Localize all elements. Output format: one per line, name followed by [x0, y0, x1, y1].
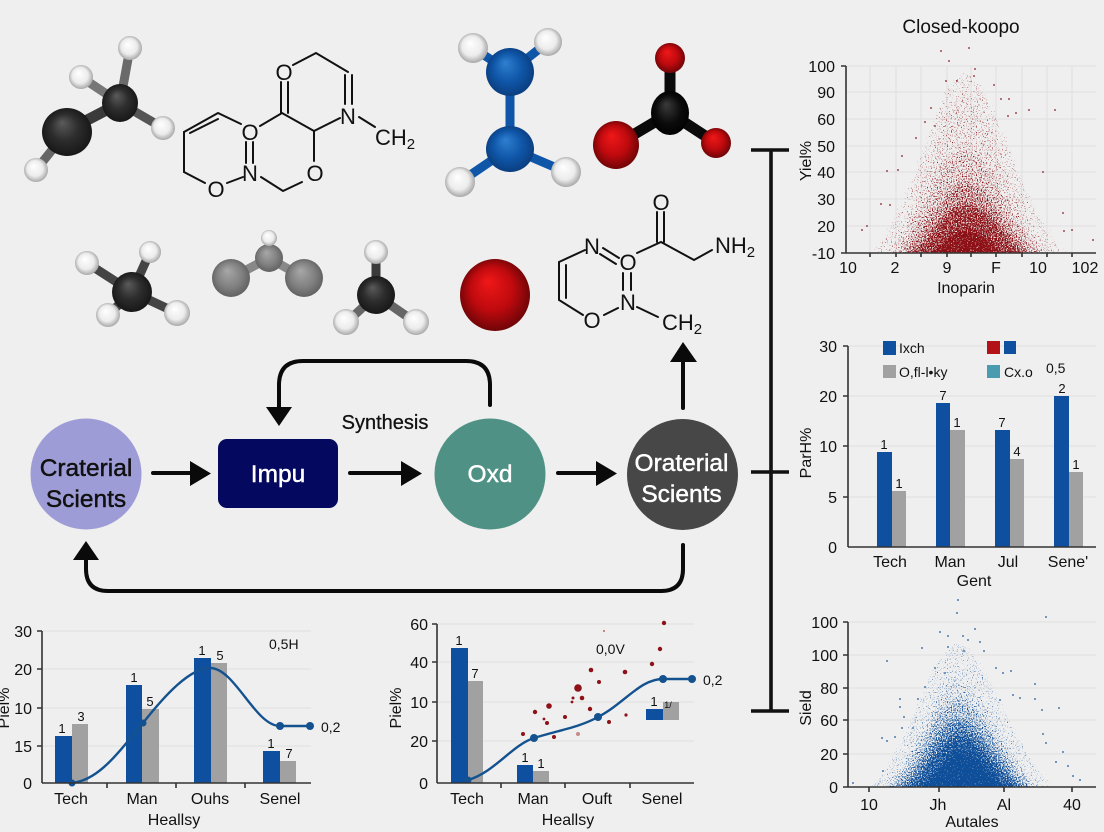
legend — [883, 340, 1066, 380]
chart: bottom left bars and line: 1 — [58, 721, 66, 736]
bars — [55, 658, 296, 783]
chart: bottom left bars and line: Heallsy — [148, 812, 200, 829]
chart: middle right bars: 2 — [1058, 381, 1066, 396]
chart: middle right bars: Jul — [998, 554, 1018, 571]
structural formula: lower ring: O — [619, 250, 637, 275]
chart: middle right bars: Man — [934, 554, 966, 571]
chart: middle right bars: ParH% — [798, 428, 815, 478]
chart: bottom left bars and line: 5 — [146, 694, 154, 709]
structural formula: lower ring: NH — [715, 233, 747, 258]
chart: bottom middle bars and line: 7 — [471, 666, 479, 681]
chart: bottom left bars and line: 0 — [23, 776, 32, 793]
red scatter points — [521, 621, 666, 739]
legend: Ixch — [899, 340, 925, 356]
chart: middle right bars: 0 — [828, 540, 837, 557]
structural formula: lower ring — [559, 190, 755, 338]
chart: bottom middle bars and line: 0,0V — [596, 641, 625, 657]
chart: bottom middle bars and line: 40 — [410, 655, 428, 672]
chart: blue scatter: Sield — [798, 690, 815, 726]
chart: red scatter: 2 — [891, 260, 900, 277]
chart: middle right bars: 7 — [998, 415, 1006, 430]
chart: blue scatter: 100 — [811, 615, 838, 632]
chart: middle right bars: 5 — [828, 490, 837, 507]
chart: red scatter: 100 — [808, 59, 835, 76]
chart: middle right bars: 7 — [939, 388, 947, 403]
arrow: to Impu — [153, 461, 211, 486]
chart: bottom left bars and line: 3 — [77, 709, 85, 724]
structural formula: upper ring system: CH — [375, 125, 407, 150]
structural formula: lower ring: N — [620, 290, 636, 315]
chart: bottom middle bars and line: Man — [517, 791, 549, 808]
chart: bottom left bars and line: 10 — [14, 701, 32, 718]
arrow: feedback loop bottom — [73, 541, 683, 591]
node: Oxd — [434, 418, 546, 530]
chart: middle right bars: 1 — [880, 437, 888, 452]
chart: bottom left bars and line: 30 — [14, 624, 32, 641]
chart: red scatter: Inoparin — [937, 280, 995, 297]
chart: red scatter: 102 — [1072, 260, 1098, 277]
structural formula: upper ring system: O — [241, 120, 259, 145]
molecule: methane, dark centre — [75, 241, 190, 327]
chart: blue scatter — [798, 600, 1096, 831]
chart: middle right bars: 1 — [895, 476, 903, 491]
legend: Cx.o — [1004, 364, 1033, 380]
structural formula: upper ring system: 2 — [407, 136, 415, 153]
chart: red scatter: 30 — [817, 192, 835, 209]
molecule: dark ball-and-stick with hydrogens — [24, 36, 175, 182]
legend: 0,5 — [1046, 360, 1066, 376]
trend line — [464, 675, 696, 784]
structural formula: upper ring system: N — [340, 104, 356, 129]
chart: bottom middle bars and line: 1 — [521, 750, 529, 765]
molecule: grey ball-and-stick — [212, 230, 323, 297]
chart: bottom left bars and line: Ouhs — [191, 791, 229, 808]
chart: bottom left bars and line: 1 — [267, 736, 275, 751]
chart: bottom middle bars and line: 1 — [650, 694, 658, 709]
chart: blue scatter: 10 — [860, 797, 878, 814]
node: Craterial Scients: Scients — [46, 486, 126, 513]
chart: blue scatter: Al — [997, 797, 1011, 814]
node: Impu — [218, 439, 338, 508]
chart: red scatter: 9 — [943, 260, 952, 277]
chart: middle right bars: Gent — [957, 573, 992, 590]
structural formula: upper ring system: O — [207, 177, 225, 202]
structural formula: upper ring system: O — [275, 60, 293, 85]
chart: bottom middle bars and line: 10 — [410, 695, 428, 712]
chart: middle right bars: 1 — [1072, 457, 1080, 472]
chart: blue scatter: 80 — [820, 681, 838, 698]
chart: blue scatter: Autales — [945, 814, 999, 831]
arrow: feedback loop top — [266, 361, 490, 426]
chart: bottom left bars and line: Man — [126, 791, 158, 808]
chart: bottom middle bars and line: Senel — [642, 791, 682, 808]
chart: bottom middle bars and line: 60 — [410, 617, 428, 634]
chart: bottom middle bars and line: 1 — [537, 756, 545, 771]
chart: bottom middle bars and line — [388, 617, 723, 829]
chart: bottom left bars and line: Tech — [54, 791, 88, 808]
chart: red scatter: 40 — [817, 165, 835, 182]
chart: blue scatter: Jh — [930, 797, 946, 814]
chart: middle right bars: Sene' — [1048, 554, 1088, 571]
node: Impu: Impu — [251, 461, 305, 488]
node: Craterial Scients — [30, 418, 142, 530]
chart: red scatter: 10 — [839, 260, 857, 277]
chart title: Closed-koopo — [902, 17, 1020, 38]
chart: middle right bars — [798, 339, 1096, 590]
chart: middle right bars: 4 — [1013, 444, 1021, 459]
chart: bottom middle bars and line: 1/ — [664, 700, 672, 710]
node: Oraterial Scients: Oraterial — [635, 450, 728, 477]
chart: bottom left bars and line: 0,5H — [269, 636, 299, 652]
node: Oraterial Scients — [627, 419, 738, 530]
molecule: single red sphere — [460, 259, 530, 331]
bracket connector — [751, 150, 789, 711]
node: Craterial Scients: Craterial — [40, 455, 132, 482]
chart: bottom left bars and line — [0, 624, 341, 829]
structural formula: lower ring: N — [584, 234, 600, 259]
chart: bottom left bars and line: 5 — [216, 648, 224, 663]
chart: red scatter: 20 — [817, 219, 835, 236]
chart: bottom middle bars and line: Piel% — [388, 688, 405, 728]
arrow: to Oraterial — [558, 461, 617, 486]
bars — [451, 648, 679, 783]
node: Oxd: Oxd — [468, 461, 512, 488]
structural formula: upper ring system — [184, 53, 415, 202]
arrow: up to molecule — [670, 342, 697, 408]
structural formula: lower ring: CH — [662, 310, 694, 335]
node: Oraterial Scients: Scients — [641, 481, 722, 508]
trend line — [68, 668, 314, 786]
chart: bottom middle bars and line: Heallsy — [542, 812, 594, 829]
chart: blue scatter: 40 — [1063, 797, 1081, 814]
chart: red scatter: 60 — [817, 112, 835, 129]
label: synthesis: Synthesis — [342, 412, 428, 434]
chart: blue scatter: 60 — [820, 713, 838, 730]
chart: bottom middle bars and line: 20 — [410, 734, 428, 751]
chart: bottom left bars and line: 0,2 — [321, 719, 341, 735]
chart: middle right bars: 1 — [953, 415, 961, 430]
chart: bottom middle bars and line: Tech — [450, 791, 484, 808]
structural formula: upper ring system: O — [306, 161, 324, 186]
chart: middle right bars: 30 — [819, 339, 837, 356]
chart: red scatter: Yiel% — [798, 141, 815, 181]
chart: bottom left bars and line: 15 — [14, 739, 32, 756]
chart: bottom left bars and line: Senel — [260, 791, 300, 808]
structural formula: lower ring: O — [652, 190, 670, 215]
chart: blue scatter: 20 — [820, 747, 838, 764]
chart: red scatter: 90 — [817, 85, 835, 102]
chart: bottom left bars and line: 20 — [14, 662, 32, 679]
chart: bottom middle bars and line: 1 — [455, 633, 463, 648]
bars — [877, 396, 1083, 547]
chart: bottom middle bars and line: 0 — [419, 776, 428, 793]
chart: middle right bars: 10 — [819, 439, 837, 456]
chart: middle right bars: Tech — [873, 554, 907, 571]
molecule: blue ball-and-stick — [445, 28, 581, 197]
chart: blue scatter: 100 — [811, 648, 838, 665]
chart: bottom left bars and line: 7 — [285, 746, 293, 761]
molecule: three hydrogen dark centre — [333, 240, 429, 335]
structural formula: lower ring: 2 — [694, 321, 702, 338]
structural formula: lower ring: 2 — [747, 244, 755, 261]
chart: red scatter: F — [991, 260, 1001, 277]
molecule: red and black ball-and-stick — [593, 43, 731, 169]
structural formula: lower ring: O — [583, 308, 601, 333]
chart: red scatter: 10 — [1029, 260, 1047, 277]
chart: bottom left bars and line: 1 — [130, 670, 138, 685]
arrow: to Oxd — [350, 461, 422, 486]
chart: bottom left bars and line: 1 — [198, 643, 206, 658]
structural formula: upper ring system: N — [242, 161, 258, 186]
chart: blue scatter: 0 — [829, 780, 838, 797]
chart: bottom middle bars and line: Ouft — [582, 791, 613, 808]
chart: red scatter: -10 — [812, 246, 835, 263]
chart: bottom middle bars and line: 0,2 — [703, 672, 723, 688]
chart: red scatter: 50 — [817, 139, 835, 156]
chart: red scatter — [798, 17, 1098, 297]
chart: middle right bars: 20 — [819, 389, 837, 406]
legend: O,fl-l•ky — [899, 364, 947, 380]
